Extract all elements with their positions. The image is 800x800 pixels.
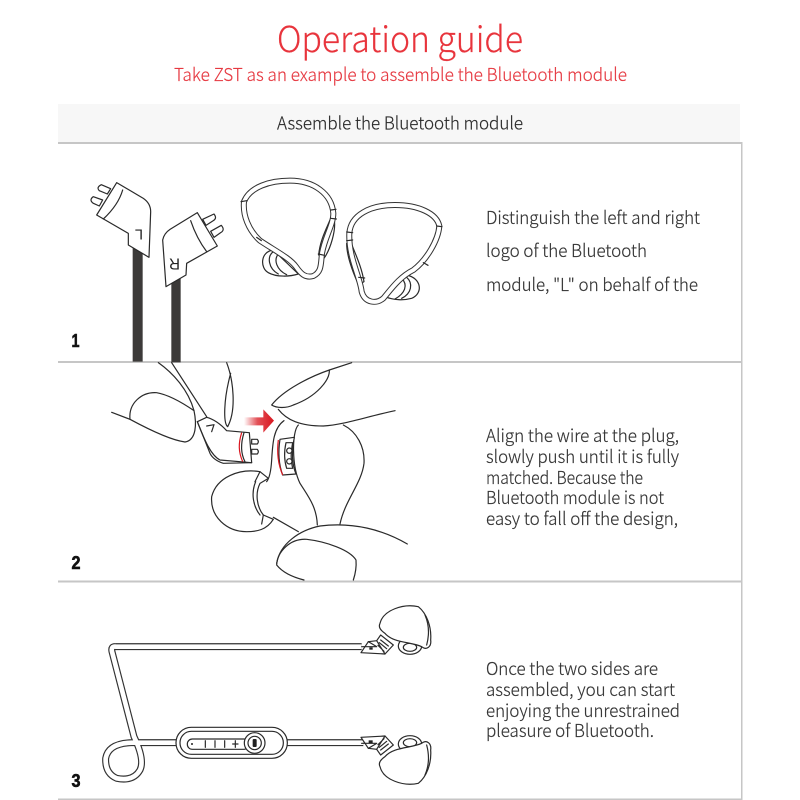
instruction text 3: pleasure of Bluetooth. [486, 718, 654, 743]
title: Operation guide [277, 11, 523, 63]
step number 3: 3 [72, 771, 80, 791]
instruction text 1 [486, 205, 700, 297]
illustration: left and right plugs: R [169, 254, 180, 271]
section header band [58, 104, 740, 142]
panel 1 [72, 181, 700, 362]
instruction text 3 [486, 656, 680, 743]
panel 3 [72, 606, 680, 791]
instruction text 3: enjoying the unrestrained [486, 698, 680, 723]
illustration: assembled Bluetooth earphones [106, 606, 431, 784]
panel 2 [72, 363, 679, 580]
left earpiece [361, 606, 431, 654]
instruction text 3: Once the two sides are [486, 656, 658, 681]
subtitle: Take ZST as an example to assemble the Bluetooth module [174, 61, 627, 87]
illustration: left and right plugs: L [135, 225, 143, 241]
Bluetooth control module [176, 727, 287, 758]
instruction text 2: matched. Because the [486, 465, 643, 490]
illustration: right ear hook loop [347, 205, 442, 302]
illustration: hands pushing plug into earphone [112, 363, 407, 580]
instruction text 1: Distinguish the left and right [486, 205, 700, 230]
step number 2: 2 [72, 553, 80, 573]
instruction text 2: Bluetooth module is not [486, 485, 664, 510]
panel frame [58, 142, 742, 800]
illustration: left ear hook loop [241, 181, 336, 277]
section header band: Assemble the Bluetooth module [277, 110, 523, 136]
instruction text 1: module, "L" on behalf of the [486, 272, 698, 297]
instruction text 3: assembled, you can start [486, 677, 675, 702]
illustration: left and right plugs [91, 183, 223, 362]
instruction text 2 [486, 423, 679, 531]
right earpiece [361, 736, 431, 784]
step number 1: 1 [72, 331, 80, 351]
instruction text 2: Align the wire at the plug, [486, 423, 679, 448]
instruction text 2: easy to fall off the design, [486, 506, 678, 531]
instruction text 2: slowly push until it is fully [486, 444, 679, 469]
instruction text 1: logo of the Bluetooth [486, 238, 647, 263]
